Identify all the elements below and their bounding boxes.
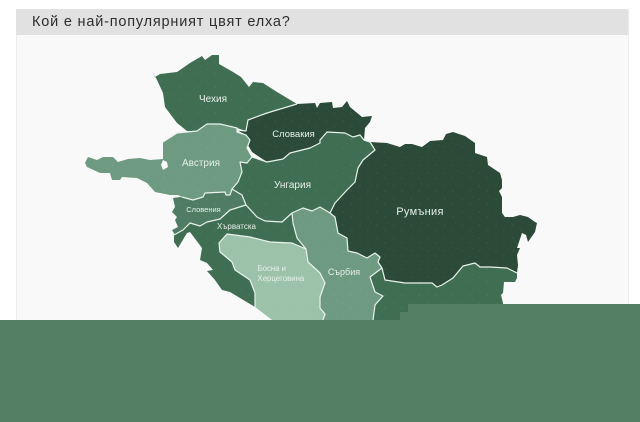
region: Austria: Австрия (182, 158, 220, 169)
region: Croatia (174, 205, 306, 307)
panel: map card (16, 9, 629, 349)
region: Serbia (292, 207, 383, 320)
heading (16, 9, 628, 35)
region: Slovakia (237, 101, 372, 162)
region: Croatia: Хърватска (217, 222, 257, 231)
region: Slovenia: Словения (186, 205, 221, 214)
region: Hungary (232, 132, 375, 222)
region: Romania: Румъния (396, 206, 444, 218)
region: Czechia (152, 55, 297, 131)
region: Hungary: Унгария (274, 180, 311, 191)
region: Austria (85, 124, 252, 200)
region: Czechia: Чехия (199, 94, 227, 105)
region: Bulgaria (370, 263, 517, 320)
region: Slovakia: Словакия (272, 129, 315, 140)
region: Bosnia and Herzegovina (219, 234, 325, 320)
region: Bosnia and Herzegovina: Босна и (258, 264, 286, 273)
region: Slovenia (172, 189, 246, 235)
region: Romania (330, 132, 537, 287)
region borders (163, 104, 517, 320)
region: Serbia: Сърбия (328, 267, 360, 277)
region: Bosnia and Herzegovina: Херцеговина (258, 274, 305, 283)
heading: Кой е най-популярният цвят елха? (32, 14, 291, 30)
speckle texture (85, 55, 537, 320)
